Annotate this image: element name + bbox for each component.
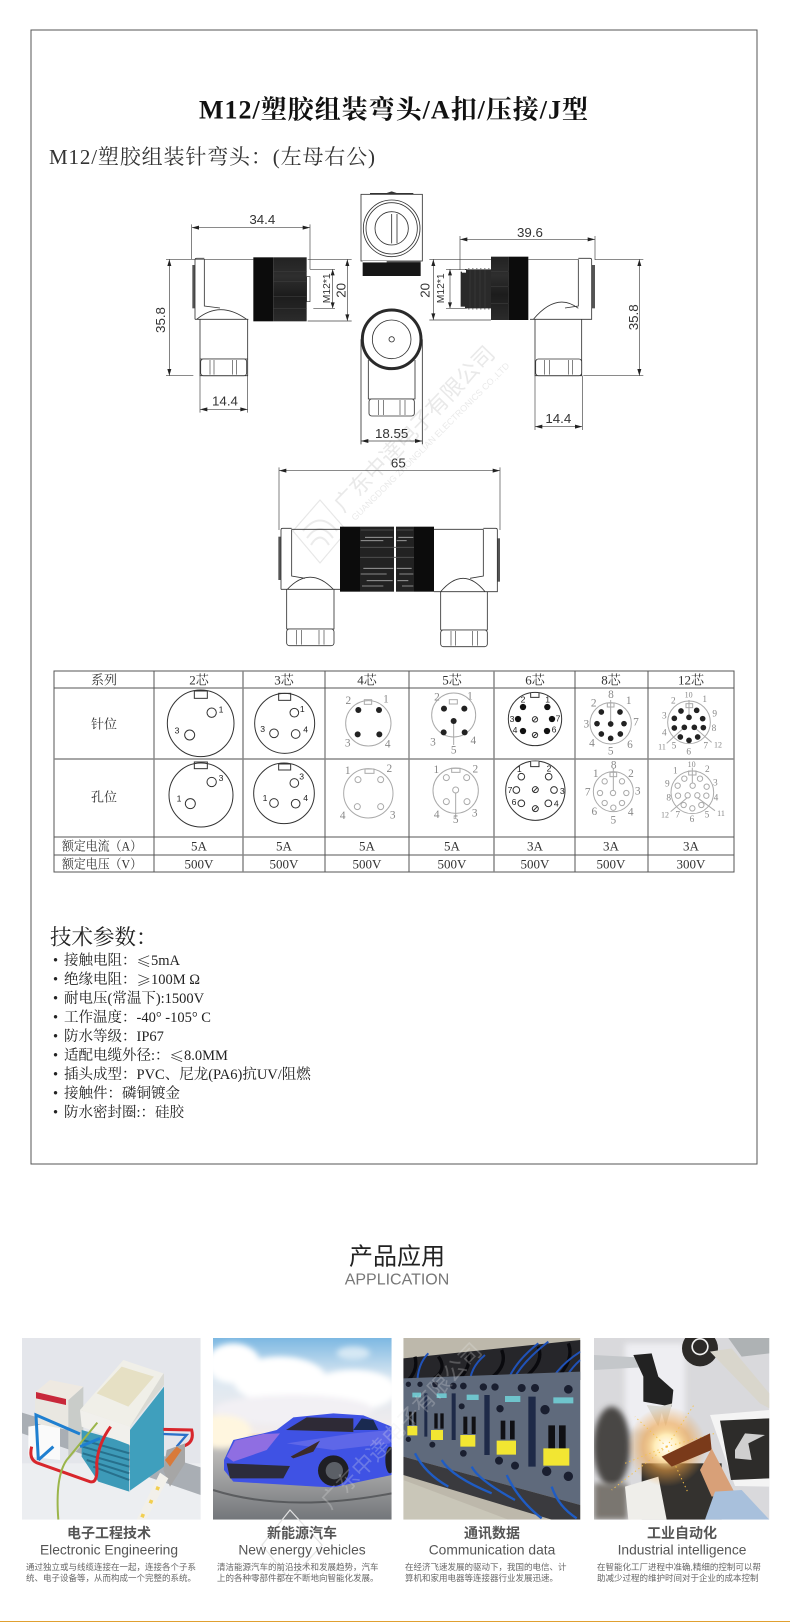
- caption: industrial intelligence: 助减少过程的维护时间对于企业的成本控制: [597, 1573, 759, 1583]
- dimension labels: right view: [417, 225, 641, 426]
- rated voltage row: 500V: [270, 856, 299, 872]
- pin diagrams: 5, 6, 8, 12 core: 5: [672, 742, 677, 752]
- end view: top: [361, 191, 422, 276]
- pin diagrams: 5, 6, 8, 12 core: 3: [583, 718, 589, 730]
- application photo: electronic engineering: [22, 1338, 201, 1520]
- table header row: [91, 672, 705, 688]
- technical parameters list: •: [53, 1048, 58, 1064]
- pin diagrams: 5, 6, 8, 12 core: 6: [627, 739, 633, 751]
- pin diagrams: 5, 6, 8, 12 core: 9: [665, 779, 670, 789]
- bottom accent line: [0, 1621, 790, 1622]
- technical parameters list: •: [53, 953, 58, 969]
- technical parameters list: •: [53, 991, 58, 1007]
- technical parameters list: 工作温度：-40° -105° C: [64, 1008, 211, 1026]
- pin diagrams: 5, 6, 8, 12 core: 6: [686, 747, 691, 757]
- end view: bottom: 18.55: [375, 426, 408, 441]
- pin diagrams: 5, 6, 8, 12 core: 6: [512, 797, 517, 807]
- rated voltage row: 300V: [677, 856, 706, 872]
- technical parameters list: •: [53, 972, 58, 988]
- rated current row: [191, 838, 700, 854]
- pin diagrams: 5, 6, 8, 12 core: 1: [467, 691, 473, 703]
- technical parameters list: •: [53, 1105, 58, 1121]
- dimension labels: right view: 14.4: [545, 411, 572, 426]
- pin diagrams: 2, 3, 4 core: 3: [345, 737, 351, 749]
- pin diagrams: 5, 6, 8, 12 core: 11: [717, 809, 725, 818]
- technical parameters heading: 技术参数：: [50, 926, 158, 950]
- pin diagrams: 5, 6, 8, 12 core: 4: [628, 807, 634, 819]
- pin diagrams: 5, 6, 8, 12 core: 1: [702, 695, 707, 705]
- pin diagrams: 5, 6, 8, 12 core: 2: [521, 694, 526, 704]
- pin diagrams: 2, 3, 4 core: 3: [219, 773, 224, 783]
- pin diagrams: 5, 6, 8, 12 core: 12: [714, 740, 722, 749]
- rated voltage row: 500V: [521, 856, 550, 872]
- end view: bottom: [361, 310, 422, 444]
- rated current row: 5A: [276, 838, 293, 854]
- pin diagrams: 5, 6, 8, 12 core: 1: [626, 695, 632, 707]
- rated voltage row: [185, 856, 706, 872]
- pin diagrams: 5, 6, 8, 12 core: 4: [554, 798, 559, 808]
- technical parameters list: 防水密封圈:：硅胶: [64, 1104, 185, 1121]
- dimension labels: right view: 20: [417, 283, 432, 298]
- pin diagrams: 5, 6, 8, 12 core: 1: [433, 764, 439, 776]
- caption: new energy vehicles: 上的各种零部件都在不断地向智能化发展。: [217, 1573, 379, 1583]
- pin diagrams: 5, 6, 8, 12 core: 2: [547, 763, 552, 773]
- pin diagrams: 5, 6, 8, 12 core: 8: [611, 760, 617, 772]
- pin diagrams: 2, 3, 4 core: 1: [300, 704, 305, 714]
- pinout table: [54, 671, 734, 872]
- mated connector pair with dimension 65: [278, 455, 500, 647]
- mated connector pair with dimension 65: 65: [391, 455, 406, 470]
- caption: communication data: Communication data: [429, 1542, 556, 1558]
- pin diagrams: 5, 6, 8, 12 core: 7: [585, 787, 591, 799]
- dimension labels: left view: 20: [333, 283, 348, 298]
- application photo: industrial intelligence: [593, 1330, 769, 1520]
- pin diagrams: 5, 6, 8, 12 core: 10: [685, 690, 693, 699]
- pin diagrams: 5, 6, 8, 12 core: 10: [688, 760, 696, 769]
- pin diagrams: 5, 6, 8, 12 core: 12: [661, 810, 669, 819]
- pin diagrams: 5, 6, 8, 12 core: 3: [713, 778, 718, 788]
- application photo: communication data: [403, 1338, 580, 1520]
- pin diagrams: 5, 6, 8, 12 core: 11: [658, 742, 666, 751]
- pin diagrams: 2, 3, 4 core: 4: [303, 724, 308, 734]
- pin diagrams: 5, 6, 8, 12 core: 7: [508, 785, 513, 795]
- pin diagrams: 5, 6, 8, 12 core: 1: [517, 764, 522, 774]
- pin diagrams: 2, 3, 4 core: 3: [390, 809, 396, 821]
- rated voltage row: 500V: [185, 856, 214, 872]
- pin diagrams: 5, 6, 8, 12 core: 4: [470, 735, 476, 747]
- technical parameters list: 防水等级：IP67: [64, 1028, 164, 1045]
- pin diagrams: 5, 6, 8, 12 core: 8: [712, 724, 717, 734]
- pin diagrams: 2, 3, 4 core: 1: [263, 793, 268, 803]
- application heading: 产品应用: [349, 1244, 445, 1270]
- application subheading: APPLICATION: [345, 1272, 449, 1288]
- pin diagrams: 2, 3, 4 core: 4: [303, 793, 308, 803]
- caption: communication data: 通讯数据: [464, 1525, 520, 1541]
- pin diagrams: 5, 6, 8, 12 core: 2: [591, 697, 597, 709]
- watermark: company logo and name: 广东中逹电子有限公司: [329, 341, 500, 517]
- rated voltage row: 500V: [353, 856, 382, 872]
- application photo: new energy vehicles: [213, 1338, 392, 1520]
- dimension labels: left view: 14.4: [212, 393, 239, 408]
- technical parameters list: 插头成型：PVC、尼龙(PA6)抗UV/阻燃: [64, 1065, 311, 1083]
- table header row: 12芯: [678, 672, 705, 688]
- dimension labels: left view: [153, 212, 348, 408]
- right connector side view: [429, 236, 643, 430]
- pin diagrams: 5, 6, 8, 12 core: 3: [510, 714, 515, 724]
- rated current row: 5A: [191, 838, 208, 854]
- caption: new energy vehicles: 清洁能源汽车的前沿技术和发展趋势，汽车: [217, 1562, 379, 1572]
- pin diagrams: 5, 6, 8, 12 core: 2: [705, 765, 710, 775]
- dimension labels: left view: 34.4: [249, 212, 276, 227]
- left connector side view: [166, 224, 352, 413]
- pin diagrams: 2, 3, 4 core: 3: [175, 726, 180, 736]
- watermark: lower: 广东中逹电子有限公司: [316, 1338, 487, 1514]
- watermark: company logo and name: [293, 341, 512, 563]
- pin diagrams: 5, 6, 8, 12 core: 3: [635, 786, 641, 798]
- caption: communication data: [405, 1525, 567, 1583]
- row labels: 额定电压（V）: [62, 856, 142, 872]
- caption: electronic engineering: 电子工程技术: [67, 1525, 151, 1541]
- row labels: [62, 716, 142, 872]
- watermark: company logo and name: GUANGDONG ZHONGLIAN ELECTRONICS CO.,LTD: [349, 360, 512, 523]
- pin diagrams: 5, 6, 8, 12 core: 4: [513, 725, 518, 735]
- pin diagrams: 5, 6, 8, 12 core: 4: [662, 728, 667, 738]
- rated current row: 5A: [359, 838, 376, 854]
- pin diagrams: 2, 3, 4 core: 3: [299, 772, 304, 782]
- pin diagrams: 2, 3, 4 core: 2: [345, 695, 351, 707]
- row labels: 额定电流（A）: [62, 838, 142, 854]
- pin diagrams: 5, 6, 8, 12 core: 2: [434, 691, 440, 703]
- caption: industrial intelligence: 工业自动化: [647, 1525, 717, 1541]
- pin diagrams: 5, 6, 8, 12 core: 1: [545, 694, 550, 704]
- rated current row: 3A: [683, 838, 700, 854]
- technical parameters list: [53, 950, 311, 1121]
- pin diagrams: 5, 6, 8, 12 core: 4: [589, 737, 595, 749]
- pin diagrams: 5, 6, 8, 12 core: 5: [451, 744, 457, 756]
- caption: communication data: 在经济飞速发展的驱动下，我国的电信、计: [405, 1562, 567, 1572]
- table header row: 4芯: [357, 672, 378, 688]
- rated current row: 3A: [603, 838, 620, 854]
- pin diagrams: 5, 6, 8, 12 core: 7: [675, 811, 680, 821]
- pin diagrams: 5, 6, 8, 12 core: 3: [560, 786, 565, 796]
- row labels: 针位: [91, 716, 117, 732]
- dimension labels: left view: 35.8: [153, 307, 168, 333]
- pin diagrams: 5, 6, 8, 12 core: 8: [666, 793, 671, 803]
- pin diagrams: 5, 6, 8, 12 core: 2: [671, 697, 676, 707]
- table header row: 3芯: [274, 672, 295, 688]
- caption: electronic engineering: Electronic Engineering: [40, 1542, 178, 1558]
- pin diagrams: 5, 6, 8, 12 core: 4: [434, 809, 440, 821]
- rated current row: 5A: [444, 838, 461, 854]
- technical parameters list: 接触电阻：≤5mA: [64, 950, 181, 972]
- pin diagrams: 5, 6, 8, 12 core: 5: [608, 746, 614, 758]
- table header row: 5芯: [442, 672, 463, 688]
- technical parameters list: •: [53, 1067, 58, 1083]
- pin diagrams: 5, 6, 8, 12 core: 6: [591, 806, 597, 818]
- technical parameters list: •: [53, 1010, 58, 1026]
- panel: product specification frame: [31, 30, 757, 1164]
- table header row: 2芯: [189, 672, 210, 688]
- pin diagrams: 2, 3, 4 core: 2: [386, 763, 392, 775]
- watermark: lower: [262, 1338, 487, 1580]
- pin diagrams: 5, 6, 8, 12 core: 3: [472, 807, 478, 819]
- caption: new energy vehicles: [217, 1525, 379, 1583]
- pin diagrams: 5, 6, 8, 12 core: 7: [633, 717, 639, 729]
- dimension labels: left view: M12*1: [322, 273, 333, 303]
- pin diagrams: 2, 3, 4 core: 3: [260, 724, 265, 734]
- table header row: 8芯: [601, 672, 622, 688]
- technical parameters list: 耐电压(常温下):1500V: [64, 989, 205, 1007]
- row labels: 孔位: [91, 790, 117, 804]
- caption: electronic engineering: 统、电子设备等，从而构成一个完整的系统。: [26, 1573, 196, 1583]
- technical parameters list: 适配电缆外径:：≤8.0MM: [64, 1046, 228, 1066]
- caption: industrial intelligence: 在智能化工厂进程中准确,精细的控制可以帮: [597, 1562, 761, 1572]
- rated current row: 3A: [527, 838, 544, 854]
- pin diagrams: 2, 3, 4 core: [167, 690, 396, 827]
- pin diagrams: 5, 6, 8, 12 core: 1: [673, 767, 678, 777]
- pin diagrams: 5, 6, 8, 12 core: 5: [705, 811, 710, 821]
- technical parameters list: •: [53, 1086, 58, 1102]
- dimension labels: right view: M12*1: [436, 273, 447, 303]
- pin diagrams: 2, 3, 4 core: 1: [345, 765, 350, 777]
- dimension labels: right view: 35.8: [626, 304, 641, 330]
- pin diagrams: 2, 3, 4 core: 4: [340, 810, 346, 822]
- pin diagrams: 5, 6, 8, 12 core: 1: [593, 768, 599, 780]
- rated voltage row: 500V: [597, 856, 626, 872]
- caption: communication data: 算机和家用电器等连接器行业发展迅速。: [405, 1573, 558, 1583]
- subtitle: M12/塑胶组装针弯头：(左母右公): [49, 145, 375, 169]
- table header row: 系列: [91, 672, 117, 688]
- caption: industrial intelligence: [597, 1525, 761, 1583]
- pin diagrams: 5, 6, 8, 12 core: 8: [608, 689, 614, 701]
- dimension drawing: four connector views: [153, 191, 643, 444]
- pin diagrams: 5, 6, 8, 12 core: 5: [453, 814, 459, 826]
- technical parameters list: 绝缘电阻：≥100M Ω: [64, 970, 200, 990]
- table header row: 6芯: [525, 672, 546, 688]
- title: M12/塑胶组装弯头/A扣/压接/J型: [199, 94, 588, 124]
- pin diagrams: 5, 6, 8, 12 core: 6: [552, 724, 557, 734]
- pin diagrams: 5, 6, 8, 12 core: 3: [430, 736, 436, 748]
- caption: electronic engineering: 通过独立或与线缆连接在一起，连接各个子系: [26, 1562, 196, 1572]
- pin diagrams: 5, 6, 8, 12 core: 7: [556, 713, 561, 723]
- pin diagrams: 5, 6, 8, 12 core: 2: [472, 763, 478, 775]
- pin diagrams: 5, 6, 8, 12 core: [430, 689, 725, 827]
- dimension labels: right view: 39.6: [517, 225, 543, 240]
- pin diagrams: 5, 6, 8, 12 core: 7: [703, 741, 708, 751]
- pin diagrams: 5, 6, 8, 12 core: 5: [610, 815, 616, 827]
- pin diagrams: 5, 6, 8, 12 core: 3: [662, 712, 667, 722]
- caption: industrial intelligence: Industrial intelligence: [618, 1542, 747, 1558]
- pin diagrams: 2, 3, 4 core: 1: [219, 704, 224, 714]
- pin diagrams: 5, 6, 8, 12 core: 9: [712, 709, 717, 719]
- technical parameters list: •: [53, 1029, 58, 1045]
- pin diagrams: 2, 3, 4 core: 1: [177, 794, 182, 804]
- pin diagrams: 5, 6, 8, 12 core: 6: [690, 815, 695, 825]
- caption: new energy vehicles: 新能源汽车: [267, 1525, 337, 1541]
- pin diagrams: 2, 3, 4 core: 4: [385, 738, 391, 750]
- pin diagrams: 5, 6, 8, 12 core: 4: [714, 793, 719, 803]
- rated voltage row: 500V: [438, 856, 467, 872]
- technical parameters list: 接触件：磷铜镀金: [64, 1085, 180, 1102]
- pin diagrams: 2, 3, 4 core: 1: [383, 693, 389, 705]
- caption: new energy vehicles: New energy vehicles: [238, 1542, 366, 1558]
- caption: electronic engineering: [26, 1525, 196, 1583]
- pin diagrams: 5, 6, 8, 12 core: 2: [628, 768, 634, 780]
